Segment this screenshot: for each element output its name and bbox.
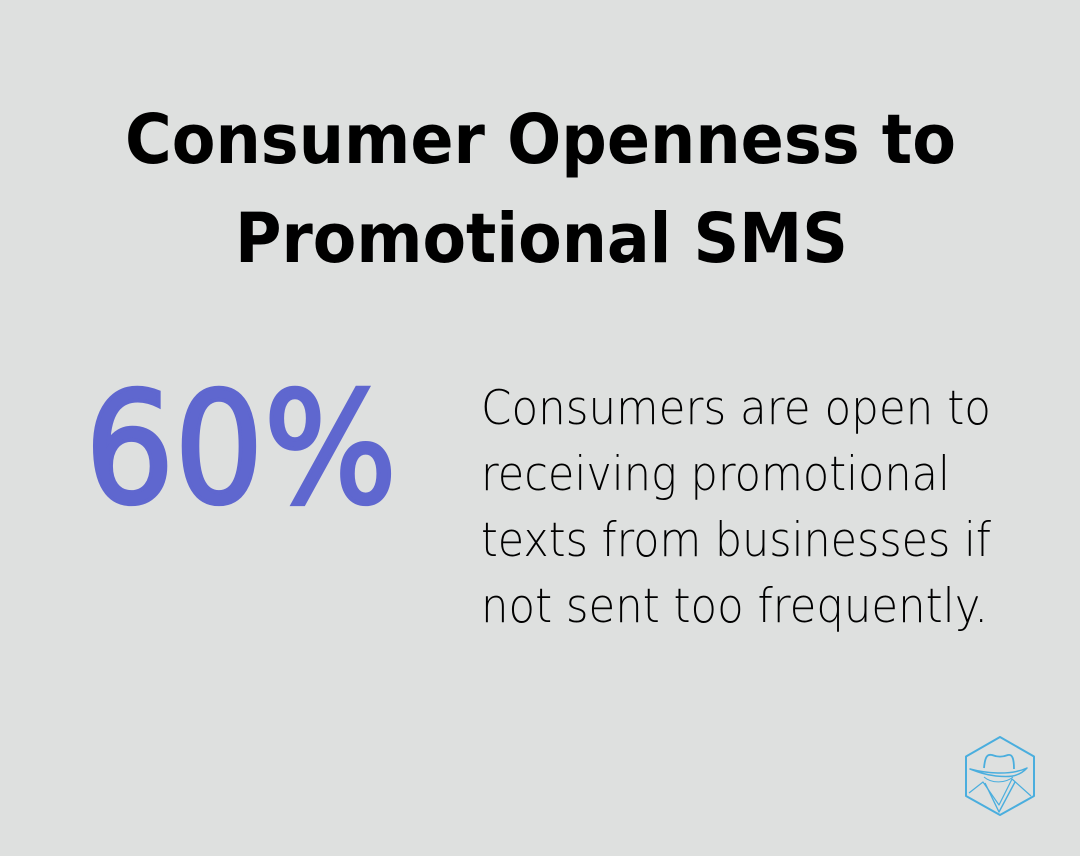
title: Consumer Openness to [125,100,956,180]
title [125,100,956,279]
description text [481,381,991,634]
statistic: 60%: 60% [85,360,397,539]
description text: receiving promotional [481,447,950,502]
icon: hexagon spy logo [966,737,1034,815]
description text: not sent too frequently. [481,579,988,634]
description text: Consumers are open to [481,381,991,436]
title: Promotional SMS [235,199,848,279]
description text: texts from businesses if [481,513,991,568]
